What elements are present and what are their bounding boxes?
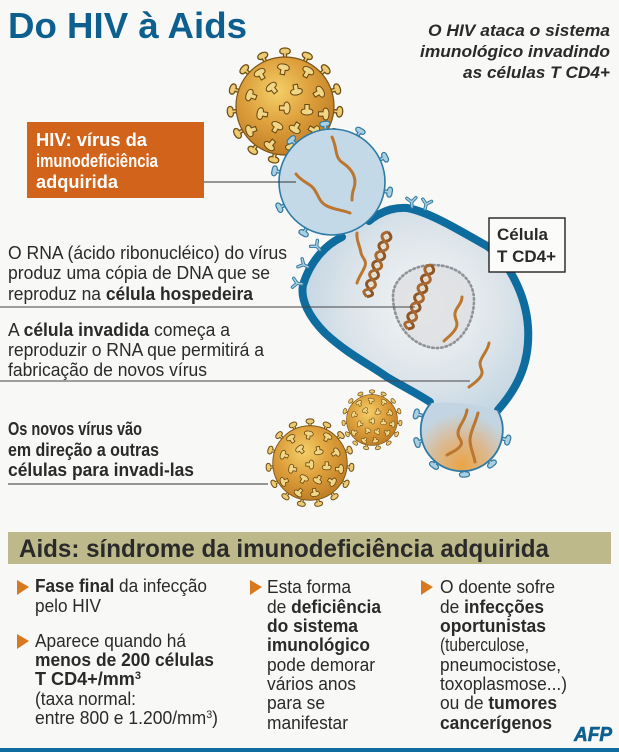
- column 1: T CD4+/mm: [35, 669, 135, 689]
- text: invaded cell: [8, 320, 265, 380]
- column 1: [17, 576, 218, 728]
- title: Do HIV à Aids: [8, 5, 247, 46]
- text: RNA to DNA: reproduz na célula hospedeira: [8, 284, 254, 304]
- column 1: menos de 200 células: [35, 650, 214, 670]
- column 2: Esta forma: [267, 577, 352, 597]
- leader line: RNA: [0, 380, 470, 382]
- label box: T CD4+ cell: [489, 218, 565, 272]
- text: new viruses: células para invadi-las: [8, 460, 194, 480]
- column 3: O doente sofre: [440, 577, 555, 597]
- column 3: cancerígenos: [440, 713, 552, 733]
- column 1: (taxa normal:: [35, 689, 136, 709]
- bullet: [250, 580, 262, 595]
- budding new virus: [412, 402, 512, 477]
- column 3: pneumocistose,: [440, 655, 561, 675]
- column 3: de infecções: [440, 597, 544, 617]
- leader line: HIV: [204, 181, 296, 183]
- heading band: Aids: Aids: síndrome da imunodeficiência adquirida: [19, 535, 550, 563]
- RNA and DNA: [357, 231, 489, 387]
- intro text: O HIV ataca o sistema: [428, 21, 610, 40]
- label box: T CD4+ cell: Célula: [497, 225, 549, 244]
- bottom bar: [0, 748, 619, 752]
- intro text: as células T CD4+: [463, 63, 610, 82]
- text: invaded cell: A célula invadida começa a: [8, 320, 231, 340]
- text: RNA to DNA: O RNA (ácido ribonucléico) do vírus: [8, 243, 287, 263]
- column 3: (tuberculose,: [440, 635, 529, 655]
- text: invaded cell: fabricação de novos vírus: [8, 360, 207, 380]
- label box: HIV: adquirida: [36, 172, 119, 192]
- cell body: [302, 208, 528, 410]
- icon: free virus medium: [342, 390, 402, 450]
- text: invaded cell: reproduzir o RNA que permitirá a: [8, 340, 265, 360]
- icon: free virus large: [266, 419, 354, 507]
- label box: HIV: [27, 122, 204, 198]
- column 3: [421, 577, 567, 733]
- column 1: entre 800 e 1.200/mm: [35, 708, 211, 728]
- label box: T CD4+ cell: T CD4+: [497, 247, 556, 266]
- column 1: ): [212, 708, 218, 728]
- label box: HIV: HIV: vírus da: [36, 130, 148, 150]
- intro text: [420, 21, 610, 82]
- diagram: CD4 cell: [292, 198, 528, 410]
- leader line: DNA: [0, 306, 415, 308]
- cell membrane: [302, 208, 528, 410]
- column 3: ou de tumores: [440, 693, 557, 713]
- receptors: [292, 198, 432, 288]
- bullet: [17, 634, 29, 649]
- intro text: imunológico invadindo: [420, 42, 610, 61]
- AFP logo: AFP: [573, 724, 613, 746]
- column 3: oportunistas: [440, 616, 546, 636]
- bullet: [17, 580, 29, 595]
- column 2: do sistema: [267, 616, 359, 636]
- HIV virus cell: [271, 121, 393, 238]
- column 2: pode demorar: [267, 655, 375, 675]
- column 2: de deficiência: [267, 597, 382, 617]
- column 1: pelo HIV: [35, 596, 101, 616]
- column 2: [250, 577, 382, 733]
- text: new viruses: Os novos vírus vão: [8, 419, 142, 439]
- column 1: Fase final da infecção: [35, 576, 207, 596]
- column 2: vários anos: [267, 674, 356, 694]
- nucleus: [393, 265, 474, 348]
- text: RNA to DNA: produz uma cópia de DNA que se: [8, 263, 270, 283]
- column 2: imunológico: [267, 635, 370, 655]
- icon: HIV virus attaching: [227, 48, 343, 164]
- leader line: new viruses: [8, 483, 268, 485]
- column 2: para se: [267, 693, 325, 713]
- text: new viruses: em direção a outras: [8, 440, 159, 460]
- text: RNA to DNA: [8, 243, 287, 304]
- column 3: toxoplasmose...): [440, 674, 567, 694]
- text: new viruses: [8, 419, 194, 480]
- column 1: Aparece quando há: [35, 631, 187, 651]
- label box: HIV: imunodeficiência: [36, 151, 159, 171]
- column 1: 3: [135, 670, 141, 682]
- column 1: 3: [206, 709, 212, 721]
- column 2: manifestar: [267, 713, 348, 733]
- bullet: [421, 580, 433, 595]
